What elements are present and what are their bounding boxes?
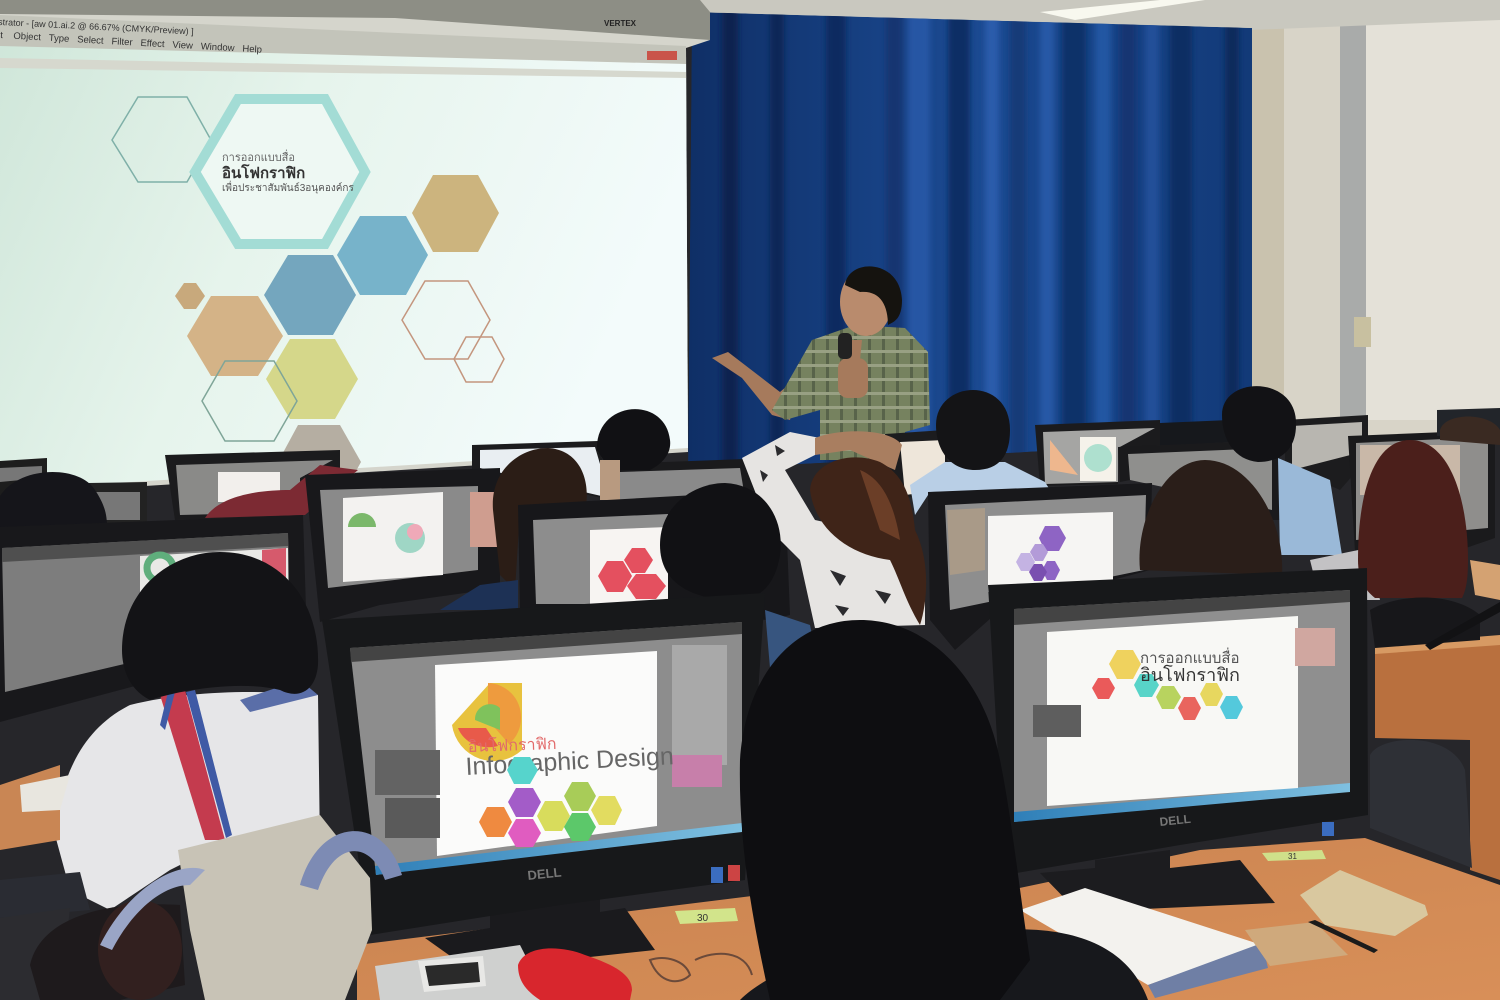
desk items [375,870,1428,1000]
monitor stand [425,895,655,970]
dark top [740,929,1148,1000]
plastic food container [1300,870,1428,936]
monitor back right one [1035,420,1160,486]
presenter [712,266,930,460]
presenter head [840,268,892,336]
short hair student near curtain [597,409,670,500]
monitor right back [1285,415,1368,490]
monitor screen [350,622,742,875]
presenter arm [712,352,800,420]
outlined hexagon bottom [202,361,297,441]
patterned handbag [100,815,402,1000]
monitor bezel [988,568,1368,875]
hand on head [815,431,902,470]
student top right [1440,416,1500,445]
logo text: อินโฟกราฟิก [1140,664,1240,685]
application menu bar [0,15,686,78]
monitor left small [88,482,147,525]
outlined hexagon left [112,97,211,182]
bob hair [122,552,318,700]
white phone [418,956,486,992]
monitor far left [0,458,47,500]
student blue shirt centre [910,390,1050,515]
DELL logo: DELL [527,865,562,883]
red mouse case [518,948,632,1000]
headphones [30,900,185,1000]
desk label 31 [1262,850,1326,861]
right wooden cabinet and chair [1370,560,1500,880]
microphone on desk [1425,602,1500,650]
design title text: อินโฟกราฟิก [467,734,557,756]
hexagon logo [1092,650,1243,720]
background monitors [0,408,1500,552]
front right monitor [988,568,1368,912]
mid row monitor two [305,468,500,622]
student in white hoodie [55,552,320,910]
brown hair student [493,448,587,590]
student brown hair right [1139,460,1282,575]
mid row monitor four [928,483,1152,650]
taskbar [375,823,742,875]
monitor back right two [1118,440,1280,520]
student with dark red jacket [205,465,358,518]
eyeglasses [650,954,752,981]
black carrying case [1370,740,1472,868]
desk label 30 [675,908,738,924]
monitor back left [165,450,340,520]
projector casing with VERTEX label [0,0,710,40]
semicircle chart [452,683,522,761]
student back far left [0,472,107,532]
small outlined hexagon [454,337,504,382]
plaid shirt [772,325,930,460]
keyboard on left desk [0,765,90,1000]
ponytail hair [810,457,926,625]
monitor screen [1014,590,1350,822]
student with raised arm and ponytail [742,431,926,628]
slide title text: การออกแบบสื่อ [222,149,295,164]
tan hexagon [187,296,283,376]
monitor behind student [610,459,780,500]
corner equipment [1437,408,1500,436]
desk label 31: 31 [1288,852,1297,861]
red hexagons [598,548,666,599]
purple hexagons [1016,526,1066,581]
dark hair student with bun [660,483,815,668]
blue top under brown hair student [440,580,518,610]
application menu bar: it Object Type Select Filter Effect View Window Help [0,30,262,56]
application menu bar: strator - [aw 01.ai.2 @ 66.67% (CMYK/Preview) ] [0,17,194,36]
artboard [1047,616,1298,806]
logo text [1140,647,1240,685]
student reddish long hair [1310,440,1468,600]
book and papers [1020,888,1262,985]
desk label 30: 30 [697,913,709,924]
tool panels [375,750,440,795]
artboard [435,651,657,856]
monitor stand [1040,850,1275,912]
khaki hexagon [412,175,499,252]
taskbar [1014,783,1350,822]
front centre monitor [322,593,765,970]
student blue shirt right [1222,386,1342,555]
grey hexagon [278,425,361,500]
back row students [0,386,1500,555]
pen [1308,920,1378,953]
slide title text: เพื่อประชาสัมพันธ์3อนุคองค์กร [222,180,354,194]
slide title text: อินโฟกราฟิก [222,163,305,182]
projection screen [0,0,710,500]
hoodie [55,692,320,910]
logo text: การออกแบบสื่อ [1140,647,1240,667]
yellow green hexagon [266,339,358,419]
small tan hexagon [175,283,205,309]
blue curtain [688,0,1252,470]
dark monitor back [1160,420,1230,446]
blue hexagon right [337,216,428,295]
slide title text [222,149,354,194]
tool panel [1033,705,1081,737]
mid row monitor left [0,515,307,722]
outlined hexagon right [402,281,490,359]
monitor back centre [472,441,612,500]
blue hexagon [264,255,356,335]
monitor behind presenter [885,430,950,500]
colored hexagons [479,757,622,847]
hair [740,620,1030,1000]
white patterned blouse [742,432,925,628]
mid row monitor three [518,490,790,620]
design title text: Infographic Design [465,742,674,781]
main desk [357,838,1500,1000]
monitor far right [1348,430,1495,552]
long dark hair student in foreground [740,620,1148,1000]
DELL logo: DELL [1159,812,1191,829]
teal title hexagon [195,99,365,244]
projector casing with VERTEX label: VERTEX [604,19,637,28]
gold smartphone [1245,922,1348,966]
monitor bezel [322,593,765,935]
laptop [375,945,548,1000]
